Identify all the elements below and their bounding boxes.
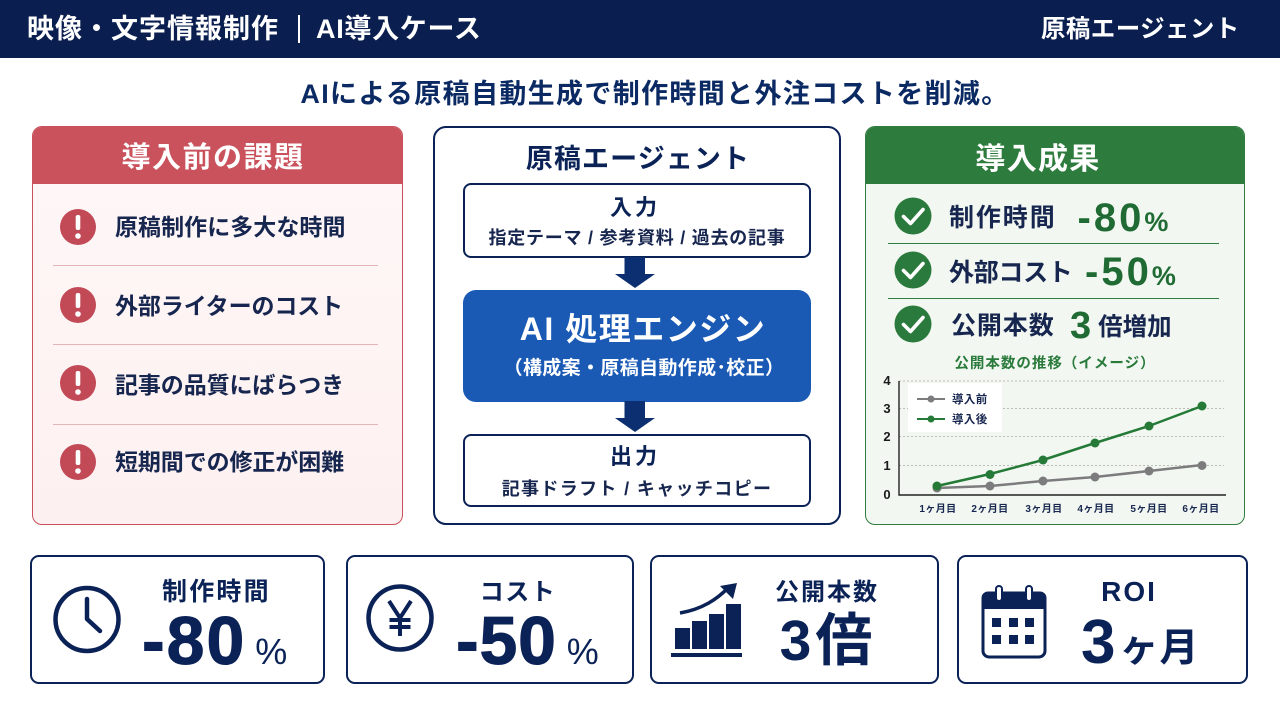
result row 1	[894, 196, 1168, 240]
input heading: 入力	[610, 195, 660, 220]
input box	[463, 183, 811, 258]
AI engine box	[463, 290, 811, 402]
panel: results	[865, 126, 1245, 525]
issue text: 外部ライターのコスト	[115, 293, 343, 319]
results heading	[864, 125, 1248, 184]
result label: 公開本数	[951, 312, 1055, 340]
series: after	[932, 402, 1206, 490]
legend	[917, 392, 988, 426]
arrow: engine to output	[615, 401, 655, 432]
series: before	[932, 461, 1206, 492]
result row 2	[894, 250, 1176, 294]
KPI value: -80%	[142, 603, 287, 679]
icon: calendar	[982, 585, 1046, 658]
KPI value: -50 %	[456, 603, 599, 679]
result label: 外部コスト	[949, 259, 1073, 287]
header divider	[298, 15, 300, 43]
legend background	[908, 383, 1002, 432]
KPI card: production time	[30, 555, 325, 684]
x-axis labels: 6ヶ月目	[1182, 503, 1220, 515]
KPI label: ROI	[1101, 576, 1157, 607]
result value: 3 倍増加	[1070, 305, 1172, 347]
x-axis labels	[919, 503, 1220, 515]
legend: 導入前	[952, 392, 988, 406]
issue text: 短期間での修正が困難	[115, 449, 344, 475]
subtitle: AIによる原稿自動生成で制作時間と外注コストを削減。	[300, 79, 1010, 109]
results heading text: 導入成果	[975, 142, 1101, 176]
issue text: 記事の品質にばらつき	[115, 372, 344, 398]
KPI value: 3ヶ月	[1081, 608, 1200, 677]
result label: 制作時間	[949, 204, 1057, 232]
panel: agent flow	[433, 126, 841, 525]
issue 3	[60, 365, 344, 401]
x-axis labels: 2ヶ月目	[971, 503, 1009, 515]
header bar	[0, 0, 1280, 58]
result row 3	[894, 305, 1172, 347]
x-axis labels: 1ヶ月目	[919, 503, 957, 515]
issue text: 原稿制作に多大な時間	[115, 214, 346, 240]
y-axis labels: 0	[883, 487, 891, 502]
x-axis labels: 5ヶ月目	[1130, 503, 1168, 515]
KPI label: 制作時間	[162, 578, 271, 606]
KPI card: ROI	[957, 555, 1248, 684]
legend: 導入後	[952, 412, 988, 426]
result value: -80%	[1078, 196, 1168, 240]
icon: yen coin	[366, 584, 434, 652]
icon: check	[894, 306, 932, 342]
output box	[463, 434, 811, 507]
icon: clock	[53, 586, 121, 654]
y-axis labels: 2	[883, 429, 891, 444]
panel heading: before	[31, 125, 406, 184]
y-axis labels: 1	[883, 458, 891, 473]
icon: check	[894, 198, 932, 234]
x-axis labels: 3ヶ月目	[1025, 503, 1063, 515]
KPI card: publication count	[650, 555, 939, 684]
x-axis labels: 4ヶ月目	[1077, 503, 1115, 515]
axes	[899, 381, 1226, 495]
issue 4	[60, 444, 344, 480]
icon: alert	[60, 444, 96, 480]
header case label: AI導入ケース	[316, 14, 482, 44]
header title: 映像・文字情報制作	[27, 14, 279, 44]
KPI label: 公開本数	[775, 579, 879, 606]
output heading: 出力	[610, 444, 660, 469]
icon: alert	[60, 365, 96, 401]
icon: check	[894, 252, 932, 288]
issue 2	[60, 287, 343, 323]
header product name: 原稿エージェント	[1041, 16, 1240, 43]
y-axis labels: 3	[883, 401, 891, 416]
KPI label: コスト	[480, 579, 556, 606]
result value: -50%	[1085, 250, 1176, 294]
y-axis labels: 4	[883, 373, 891, 388]
output detail: 記事ドラフト / キャッチコピー	[502, 479, 772, 499]
chart title: 公開本数の推移（イメージ）	[954, 356, 1156, 372]
arrow: input to engine	[615, 257, 655, 288]
KPI card: cost	[346, 555, 634, 684]
panel: before challenges	[32, 126, 403, 525]
icon: alert	[60, 287, 96, 323]
icon: alert	[60, 209, 96, 245]
input detail: 指定テーマ / 参考資料 / 過去の記事	[488, 228, 786, 248]
engine detail: （構成案・原稿自動作成･校正）	[504, 358, 784, 378]
KPI value: 3倍	[780, 609, 876, 673]
icon: growth chart	[671, 583, 742, 657]
agent heading: 原稿エージェント	[526, 144, 750, 174]
y-axis labels	[883, 373, 891, 502]
before heading text: 導入前の課題	[121, 142, 304, 174]
engine title: AI 処理エンジン	[520, 310, 766, 346]
issue 1	[60, 209, 346, 245]
